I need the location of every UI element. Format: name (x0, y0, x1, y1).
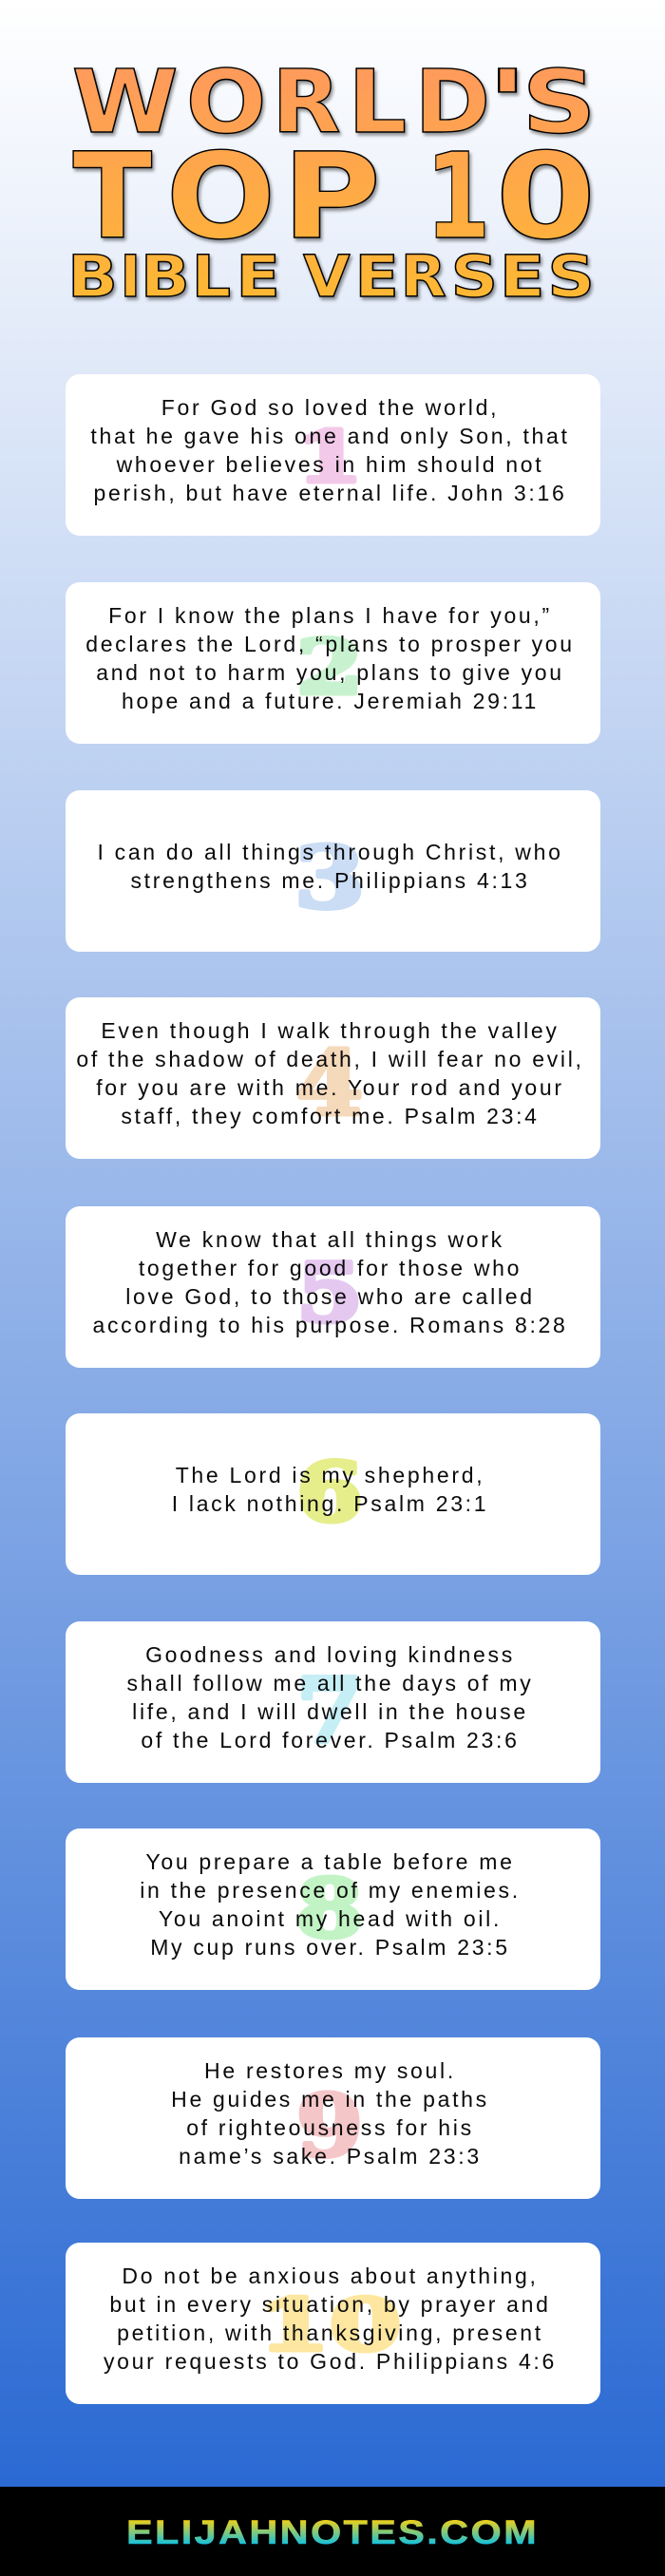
verse text 9: of righteousness for his (186, 2115, 474, 2140)
verse text 8: You anoint my head with oil. (159, 1906, 502, 1931)
verse text 8: You prepare a table before me (145, 1849, 515, 1874)
verse text 4 (76, 1018, 584, 1128)
verse text 1: For God so loved the world, (162, 395, 499, 420)
verse text 10 (104, 2263, 557, 2374)
verse text 1 (90, 395, 570, 505)
verse text 8: My cup runs over. Psalm 23:5 (150, 1935, 510, 1960)
website name: ELIJAHNOTES.COM (126, 2514, 539, 2551)
title line: BIBLE VERSES: S (450, 243, 498, 311)
verse text 9: He restores my soul. (204, 2058, 456, 2083)
verse text 8 (140, 1849, 521, 1960)
verse text 6: I lack nothing. Psalm 23:1 (172, 1491, 488, 1516)
verse text 7: Goodness and loving kindness (145, 1642, 515, 1667)
verse text 7: life, and I will dwell in the house (132, 1699, 528, 1724)
verse text 5: love God, to those who are called (125, 1284, 535, 1309)
number 7: 7 (296, 1659, 363, 1764)
title line: BIBLE VERSES: B (141, 243, 190, 311)
number 5: 5 (296, 1246, 363, 1341)
verse text 10: Do not be anxious about anything, (122, 2263, 539, 2288)
verse text 4: of the shadow of death, I will fear no evil, (76, 1047, 584, 1071)
verse text 9: name’s sake. Psalm 23:3 (179, 2144, 482, 2169)
panel: verse 1 (66, 374, 600, 536)
verse text 10: petition, with thanksgiving, present (117, 2320, 543, 2345)
title line: WORLD'S: L (348, 51, 407, 153)
title line: BIBLE VERSES: V (303, 243, 351, 311)
title line: WORLD'S: ' (485, 51, 530, 153)
number 1: 1 (296, 417, 363, 499)
title line: BIBLE VERSES: E (500, 243, 545, 311)
title line: TOP 10: O (166, 128, 276, 266)
title line: TOP 10: 1 (426, 128, 490, 266)
number 3: 3 (294, 827, 365, 927)
title line: BIBLE VERSES: L (192, 243, 231, 311)
title line: BIBLE VERSES: R (401, 243, 446, 311)
footer (0, 2487, 665, 2576)
verse text 5: together for good for those who (139, 1256, 522, 1280)
panel: verse 4 (66, 997, 600, 1159)
title (67, 51, 597, 311)
verse text 1: that he gave his one and only Son, that (90, 424, 570, 448)
number 9: 9 (296, 2075, 363, 2175)
verse text 3: strengthens me. Philippians 4:13 (130, 868, 530, 893)
title line: WORLD'S: R (272, 51, 341, 153)
verse text 5 (92, 1227, 568, 1337)
verse text 5: We know that all things work (156, 1227, 504, 1252)
number 2: 2 (296, 623, 363, 711)
title line: WORLD'S: W (72, 51, 179, 153)
verse text 9: He guides me in the paths (171, 2087, 489, 2112)
title line: BIBLE VERSES: E (236, 243, 280, 311)
number 10: 10 (258, 2283, 401, 2367)
panel: verse 3 (66, 790, 600, 952)
verse text 6: The Lord is my shepherd, (176, 1463, 484, 1487)
verse text 6 (172, 1463, 488, 1516)
verse text 2: declares the Lord, “plans to prosper you (86, 632, 575, 656)
verse text 3 (97, 840, 563, 893)
verse text 9 (171, 2058, 489, 2169)
verse text 7: of the Lord forever. Psalm 23:6 (141, 1728, 520, 1752)
verse text 4: Even though I walk through the valley (101, 1018, 560, 1043)
panel: verse 10 (66, 2243, 600, 2404)
verse text 3: I can do all things through Christ, who (97, 840, 563, 864)
panel: verse 6 (66, 1413, 600, 1575)
number 8: 8 (296, 1862, 363, 1956)
verse text 2: and not to harm you, plans to give you (96, 660, 564, 685)
title line: TOP 10: 0 (495, 128, 597, 266)
verse text 2: hope and a future. Jeremiah 29:11 (122, 689, 539, 713)
verse text 7 (127, 1642, 534, 1752)
verse text 2 (86, 603, 575, 713)
panel: verse 2 (66, 582, 600, 744)
number 4: 4 (296, 1032, 363, 1135)
panel: verse 5 (66, 1206, 600, 1368)
panel: verse 7 (66, 1621, 600, 1783)
verse text 1: whoever believes in him should not (117, 452, 543, 477)
title line: TOP 10: T (72, 128, 152, 266)
title line: WORLD'S: O (186, 51, 267, 153)
verse text 5: according to his purpose. Romans 8:28 (92, 1313, 568, 1337)
panel: verse 8 (66, 1828, 600, 1990)
verse text 8: in the presence of my enemies. (140, 1878, 521, 1903)
verse text 7: shall follow me all the days of my (127, 1671, 534, 1695)
verse text 2: For I know the plans I have for you,” (108, 603, 552, 628)
verse text 1: perish, but have eternal life. John 3:16 (93, 481, 566, 505)
title line: BIBLE VERSES: S (547, 243, 595, 311)
title line: BIBLE VERSES: I (120, 243, 141, 311)
title line: BIBLE VERSES: B (67, 243, 118, 311)
verse text 4: staff, they comfort me. Psalm 23:4 (121, 1104, 540, 1128)
title line: WORLD'S: D (414, 51, 490, 153)
panel: verse 9 (66, 2037, 600, 2199)
title line: BIBLE VERSES: E (354, 243, 399, 311)
title line: WORLD'S: S (522, 51, 597, 153)
number 6: 6 (296, 1446, 363, 1541)
verse text 4: for you are with me. Your rod and your (96, 1075, 564, 1100)
verse text 10: your requests to God. Philippians 4:6 (104, 2349, 557, 2374)
verse text 10: but in every situation, by prayer and (109, 2292, 551, 2317)
title line: TOP 10: P (282, 128, 381, 266)
